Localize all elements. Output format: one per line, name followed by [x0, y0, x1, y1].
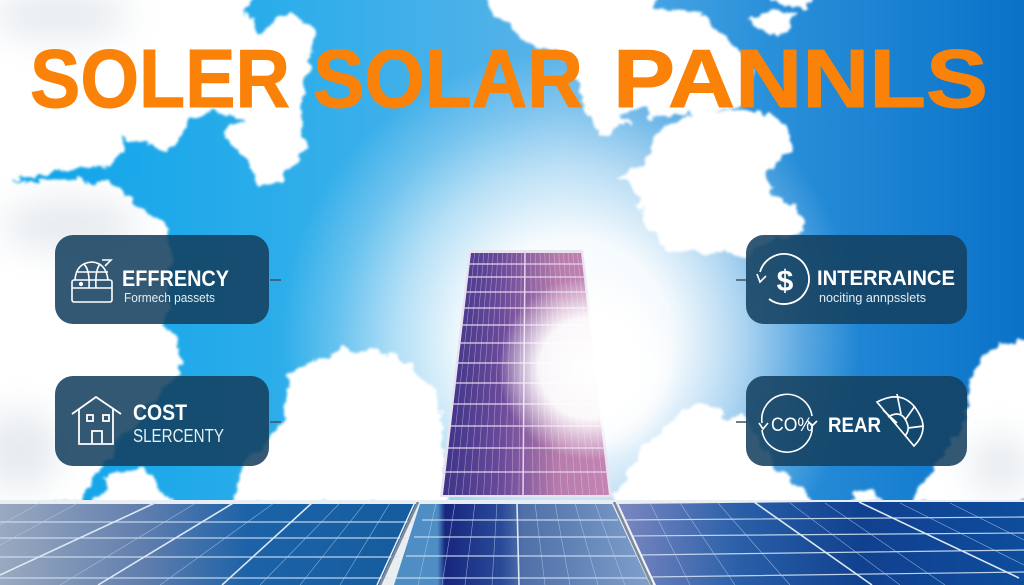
- heading: rear: REAR: [828, 414, 881, 437]
- subtext: formech passets: Formech passets: [124, 291, 215, 305]
- icon: co2 cycle: CO%: [771, 415, 813, 436]
- heading: cost: COST: [133, 400, 187, 425]
- array: right: [617, 500, 1024, 585]
- panel cell lines: [448, 252, 604, 496]
- cloud: low left: [92, 470, 178, 505]
- icon: gauge fan: [877, 394, 924, 446]
- cloud: right: [908, 340, 1024, 505]
- cloud: top left: [0, 0, 318, 190]
- title: [30, 32, 988, 125]
- array strong frame lines: [0, 502, 1019, 585]
- card: cost: [55, 376, 269, 466]
- icon: dollar cycle: [757, 254, 809, 304]
- card: efficiency: [55, 235, 269, 324]
- array fine cell lines: [0, 503, 1024, 585]
- solar array foreground: [0, 500, 1024, 585]
- cloud: upper centre right: [620, 110, 805, 256]
- cloud: top centre: [487, 0, 755, 135]
- cloud: lower right of panel: [612, 405, 815, 505]
- cloud: small top right: [750, 0, 812, 38]
- array: centre: [394, 504, 650, 585]
- cloud: tiny right: [848, 488, 884, 505]
- connector lines: [270, 280, 747, 422]
- subtext: nociting annpsslets: nociting annpsslets: [819, 291, 926, 305]
- icon: dollar cycle: $: [777, 265, 794, 298]
- icon: house: [72, 397, 121, 444]
- subtext: slercenty: SLERCENTY: [133, 426, 224, 446]
- icon: dome building: [72, 260, 112, 302]
- tall solar panel: [440, 250, 612, 497]
- card: rear: [746, 376, 967, 466]
- title: PANNLS: [613, 32, 988, 125]
- array: left: [0, 504, 416, 585]
- panel rows: [440, 264, 612, 472]
- cloud: left bank: [0, 180, 185, 510]
- title: SOLAR: [313, 32, 583, 125]
- heading: interraince: INTERRAINCE: [817, 267, 955, 290]
- array grid rows: [0, 517, 1024, 578]
- cloud: lower centre: [232, 350, 448, 505]
- title: SOLER: [30, 32, 290, 125]
- icon: co2 cycle: [759, 394, 817, 452]
- card: interraince: [746, 235, 967, 324]
- sun glare: [498, 276, 682, 460]
- array dark frames: [380, 502, 652, 585]
- heading: effrency: EFFRENCY: [122, 266, 229, 291]
